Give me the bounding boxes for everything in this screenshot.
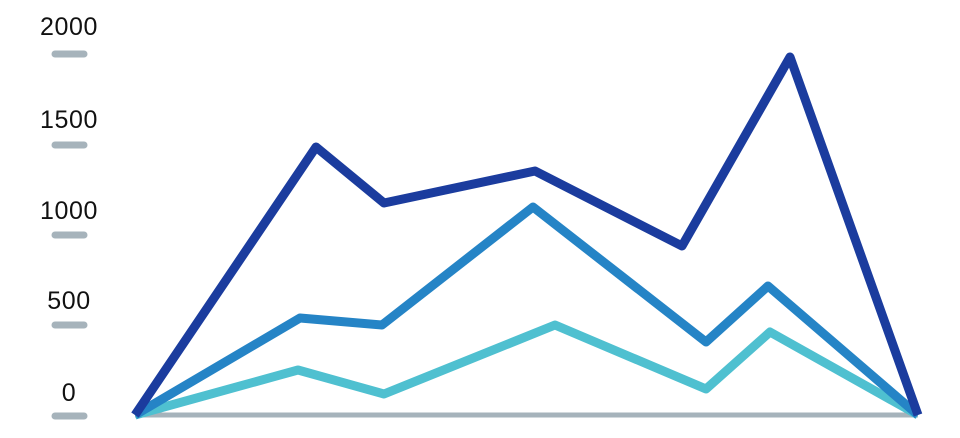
y axis labels and ticks [40,13,98,416]
series: dark [135,57,918,415]
y axis labels and ticks: 500 [47,287,91,315]
y axis labels and ticks: 1000 [40,197,98,225]
y axis labels and ticks: 1500 [40,106,98,134]
series: light [135,325,918,415]
baseline [135,412,918,418]
y axis labels and ticks: 2000 [40,13,98,41]
series: mid [135,207,918,415]
y axis labels and ticks: 0 [62,379,76,407]
